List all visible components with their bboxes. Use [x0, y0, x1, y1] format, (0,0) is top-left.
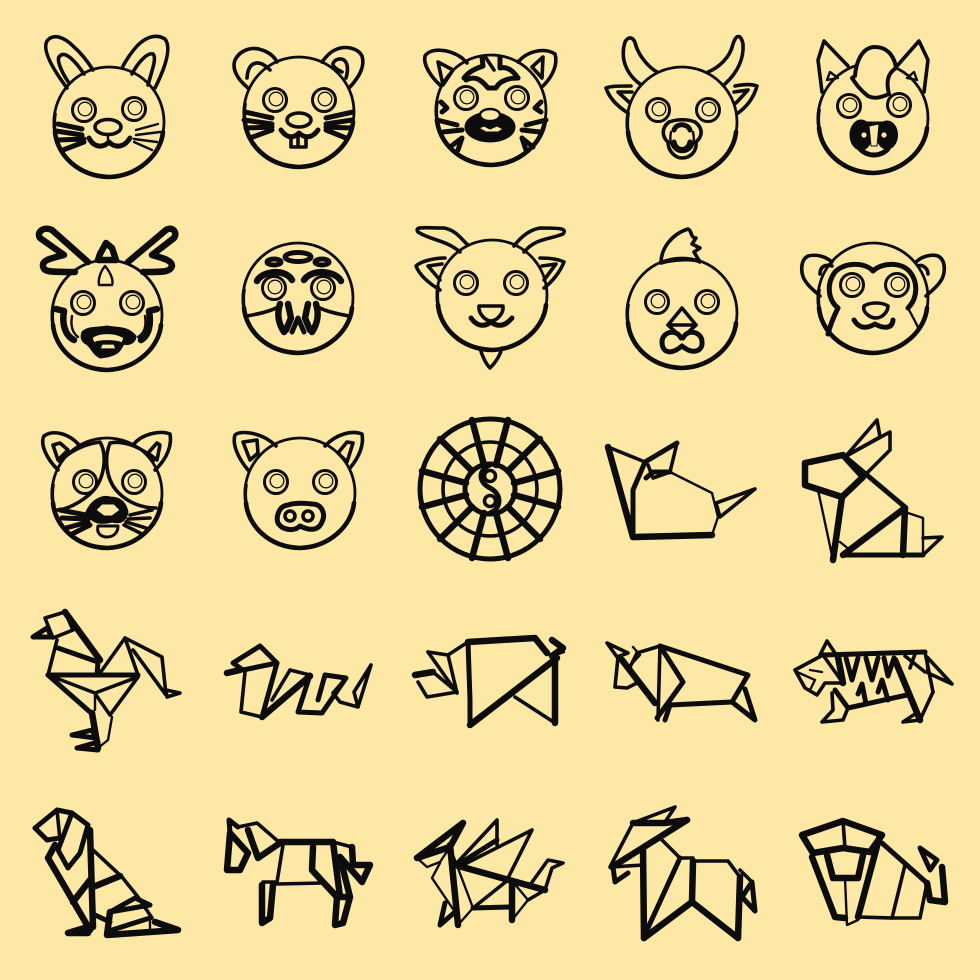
- icon: origami dragon: [417, 820, 563, 925]
- icon: origami monkey: [802, 821, 945, 925]
- icon: origami rooster: [33, 612, 180, 750]
- icon: goat face: [416, 228, 564, 368]
- icon: origami pig: [415, 638, 564, 725]
- icon: cat face: [43, 432, 170, 548]
- icon: origami tiger: [795, 641, 952, 722]
- icon: zodiac wheel with yin-yang: [420, 419, 560, 559]
- icon: pig face: [234, 432, 362, 548]
- icon: rooster face: [627, 229, 737, 368]
- icon: origami horse: [227, 820, 370, 925]
- icon: dragon face: [39, 229, 175, 370]
- icon: origami rabbit: [805, 420, 942, 560]
- icon: origami snake: [227, 646, 371, 717]
- icon: monkey face: [802, 243, 944, 353]
- icon: tiger face: [425, 50, 556, 165]
- icon: ox face: [606, 36, 757, 177]
- icon: origami dog: [35, 810, 178, 935]
- icon: snake face: [243, 243, 353, 353]
- icon: origami rat: [608, 443, 755, 537]
- icon: horse face: [818, 41, 928, 173]
- icon: origami ox: [607, 643, 755, 720]
- icon: origami goat: [610, 807, 755, 938]
- icon: rat face: [234, 48, 363, 167]
- icon: rabbit face: [46, 36, 168, 177]
